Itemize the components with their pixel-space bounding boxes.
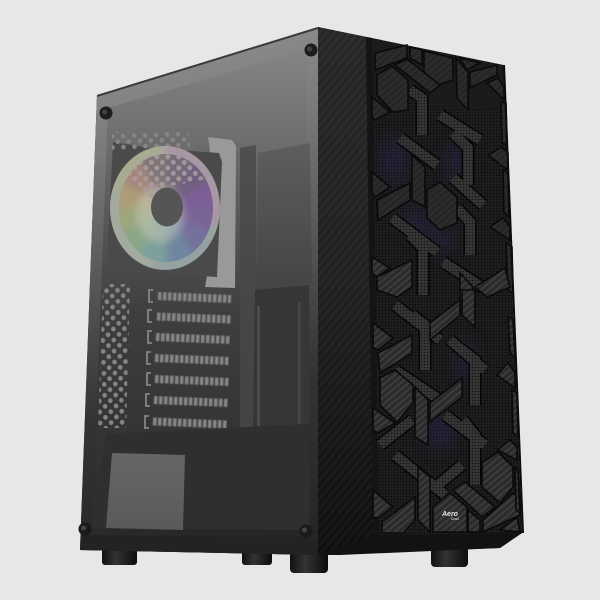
PSU window bbox=[106, 453, 185, 530]
infographic: PC case product image bbox=[78, 27, 524, 573]
brand logo bbox=[441, 511, 459, 521]
bottom chassis rail bbox=[80, 535, 318, 555]
screw bottom right bbox=[300, 524, 312, 538]
glass edge highlight bbox=[97, 27, 318, 97]
screw bottom left bbox=[78, 522, 92, 536]
bottom face bbox=[318, 533, 522, 555]
right window recess bbox=[257, 143, 312, 283]
slot bracket hooks bbox=[145, 290, 153, 428]
window rails bbox=[257, 302, 300, 426]
side front strip bbox=[318, 27, 373, 555]
mesh strip shadows bbox=[380, 90, 485, 495]
left vent holes bbox=[98, 284, 130, 428]
brand logo: Cool bbox=[451, 517, 459, 521]
screw top left bbox=[100, 106, 112, 120]
fan hub hole bbox=[151, 188, 183, 226]
carbon tiles upper bbox=[372, 45, 513, 293]
brand logo: Aero bbox=[441, 511, 459, 518]
top vent holes bbox=[112, 132, 190, 150]
PCI slots bbox=[153, 296, 231, 424]
feet bbox=[102, 545, 468, 573]
case body backing bbox=[80, 27, 522, 555]
fan frame bbox=[107, 142, 222, 277]
front panel bbox=[366, 37, 524, 535]
fan outer ring bbox=[110, 146, 220, 270]
fan hub glow bbox=[136, 185, 184, 243]
front blue fan glows bbox=[381, 134, 475, 452]
case interior bbox=[92, 50, 308, 530]
glass side panel bbox=[80, 27, 318, 555]
lower window bbox=[253, 285, 310, 427]
carbon tiles lower bbox=[372, 257, 520, 533]
fan rgb blades bbox=[119, 154, 213, 262]
front right edge bbox=[503, 65, 524, 533]
fan bracket bbox=[205, 137, 236, 288]
motherboard tray column bbox=[240, 145, 256, 432]
side panel screws bbox=[78, 44, 318, 538]
mesh strips bbox=[380, 90, 485, 495]
PSU shroud bbox=[92, 424, 310, 530]
front mesh base bbox=[366, 37, 522, 535]
RGB fan bbox=[110, 146, 220, 270]
fan grille holes bbox=[128, 154, 204, 198]
screw top right bbox=[304, 44, 318, 56]
